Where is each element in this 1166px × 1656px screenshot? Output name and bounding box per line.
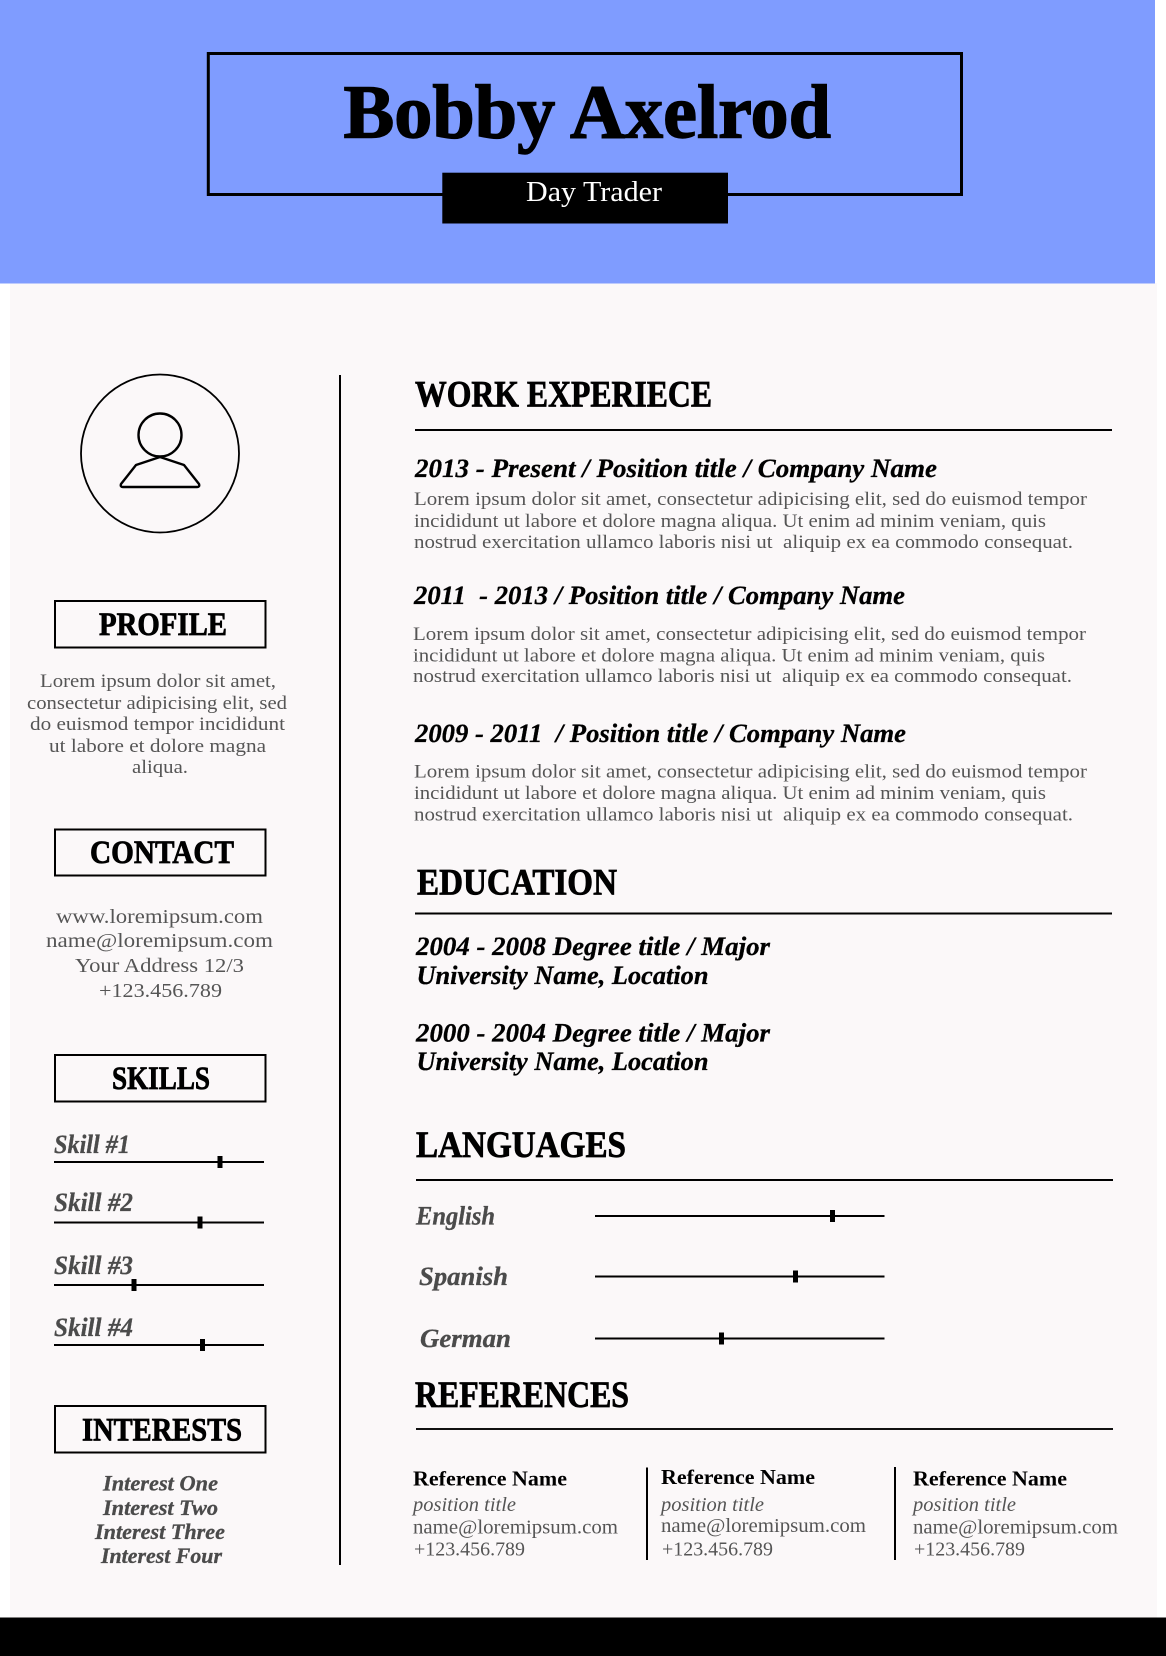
title: name: Bobby Axelrod xyxy=(344,71,831,155)
contact details: Your Address 12/3 xyxy=(75,955,244,977)
job 1: 2013 - Present / Position title / Company Name xyxy=(414,454,937,483)
job 3: incididunt ut labore et dolore magna aliqua. Ut enim ad minim veniam, quis xyxy=(414,783,1046,804)
reference 2: +123.456.789 xyxy=(662,1538,773,1560)
heading: education: EDUCATION xyxy=(417,862,617,904)
skill 3: Skill #3 xyxy=(54,1251,133,1280)
heading: references: REFERENCES xyxy=(415,1375,629,1416)
profile text: do euismod tempor incididunt xyxy=(30,714,286,735)
skill 1: Skill #1 xyxy=(54,1130,130,1159)
interests list: Interest Four xyxy=(100,1543,222,1568)
job 3 xyxy=(414,719,1088,826)
reference 1: position title xyxy=(411,1494,516,1516)
skill 2: Skill #2 xyxy=(54,1188,133,1217)
profile text: aliqua. xyxy=(132,757,188,778)
language: spanish: Spanish xyxy=(419,1262,508,1291)
language: german xyxy=(420,1324,884,1353)
profile text: ut labore et dolore magna xyxy=(49,736,267,757)
job title badge xyxy=(442,173,728,224)
column divider xyxy=(339,375,341,1565)
skill 4 xyxy=(54,1313,264,1351)
interests list: Interest One xyxy=(102,1470,218,1496)
interests list xyxy=(94,1470,225,1568)
skill 4: Skill #4 xyxy=(54,1313,133,1342)
heading: skills xyxy=(55,1055,266,1102)
profile text: consectetur adipicising elit, sed xyxy=(27,693,288,714)
panel: education xyxy=(415,862,1112,1076)
heading: contact xyxy=(55,830,266,876)
heading: work experience: WORK EXPERIECE xyxy=(415,374,712,416)
panel: references xyxy=(411,1375,1118,1560)
divider 1 xyxy=(646,1468,648,1560)
reference 3: position title xyxy=(911,1494,1016,1516)
name frame xyxy=(208,54,962,194)
reference 2 xyxy=(659,1465,866,1560)
language: german: German xyxy=(420,1324,511,1353)
heading: interests: INTERESTS xyxy=(82,1412,242,1448)
degree 1 xyxy=(415,932,771,990)
job 3: 2009 - 2011 / Position title / Company Name xyxy=(414,719,906,748)
panel: left sidebar xyxy=(27,374,288,1568)
reference 2: name@loremipsum.com xyxy=(661,1515,866,1537)
reference 1: +123.456.789 xyxy=(414,1538,525,1560)
job 1: nostrud exercitation ullamco laboris nisi ut aliquip ex ea commodo consequat. xyxy=(414,532,1073,553)
job 3: Lorem ipsum dolor sit amet, consectetur adipicising elit, sed do euismod tempor xyxy=(414,762,1088,782)
contact details: name@loremipsum.com xyxy=(46,930,274,952)
job 1 xyxy=(414,454,1088,553)
language: spanish xyxy=(419,1262,884,1291)
heading: contact: CONTACT xyxy=(90,835,234,871)
job 2 xyxy=(413,581,1087,687)
profile text: Lorem ipsum dolor sit amet, xyxy=(40,671,276,692)
interests list: Interest Three xyxy=(94,1519,225,1544)
heading: skills: SKILLS xyxy=(112,1061,210,1097)
heading: profile xyxy=(55,601,266,648)
panel: languages xyxy=(415,1125,1113,1353)
language: english: English xyxy=(415,1202,495,1230)
degree 2: University Name, Location xyxy=(416,1047,708,1076)
job 2: 2011 - 2013 / Position title / Company Name xyxy=(413,581,905,610)
reference 1: Reference Name xyxy=(413,1466,567,1490)
contact details xyxy=(46,906,274,1002)
degree 1: University Name, Location xyxy=(416,961,708,990)
reference 2: position title xyxy=(659,1494,764,1516)
job 2: incididunt ut labore et dolore magna aliqua. Ut enim ad minim veniam, quis xyxy=(413,646,1045,666)
job 3: nostrud exercitation ullamco laboris nisi ut aliquip ex ea commodo consequat. xyxy=(414,804,1073,826)
divider 2 xyxy=(894,1467,896,1560)
profile text xyxy=(27,671,288,778)
panel: header banner xyxy=(0,0,1155,284)
icon: profile avatar xyxy=(81,374,239,532)
interests list: Interest Two xyxy=(102,1495,218,1520)
job 2: Lorem ipsum dolor sit amet, consectetur adipicising elit, sed do euismod tempor xyxy=(413,624,1087,645)
reference 3: +123.456.789 xyxy=(914,1538,1025,1560)
reference 1 xyxy=(411,1466,618,1560)
reference 3: name@loremipsum.com xyxy=(913,1516,1118,1538)
job 2: nostrud exercitation ullamco laboris nisi ut aliquip ex ea commodo consequat. xyxy=(413,666,1072,687)
reference 1: name@loremipsum.com xyxy=(413,1516,618,1538)
contact details: +123.456.789 xyxy=(99,980,222,1002)
contact details: www.loremipsum.com xyxy=(56,906,263,928)
degree 1: 2004 - 2008 Degree title / Major xyxy=(415,932,771,961)
heading: profile: PROFILE xyxy=(99,607,227,643)
language: english xyxy=(415,1202,884,1230)
heading: interests xyxy=(55,1406,266,1452)
skill 3 xyxy=(54,1251,264,1291)
degree 2: 2000 - 2004 Degree title / Major xyxy=(415,1018,771,1048)
skill bars xyxy=(54,1130,264,1351)
reference 2: Reference Name xyxy=(661,1465,815,1489)
job 1: Lorem ipsum dolor sit amet, consectetur adipicising elit, sed do euismod tempor xyxy=(414,489,1088,510)
bottom bar xyxy=(0,1618,1166,1656)
skill 1 xyxy=(54,1130,264,1168)
reference 3 xyxy=(911,1466,1118,1560)
job 1: incididunt ut labore et dolore magna aliqua. Ut enim ad minim veniam, quis xyxy=(414,511,1046,532)
heading: languages: LANGUAGES xyxy=(416,1125,626,1166)
skill 2 xyxy=(54,1188,264,1228)
job title badge: Day Trader xyxy=(526,176,662,208)
degree 2 xyxy=(415,1018,771,1076)
reference 3: Reference Name xyxy=(913,1466,1067,1490)
panel: work experience xyxy=(413,374,1112,826)
